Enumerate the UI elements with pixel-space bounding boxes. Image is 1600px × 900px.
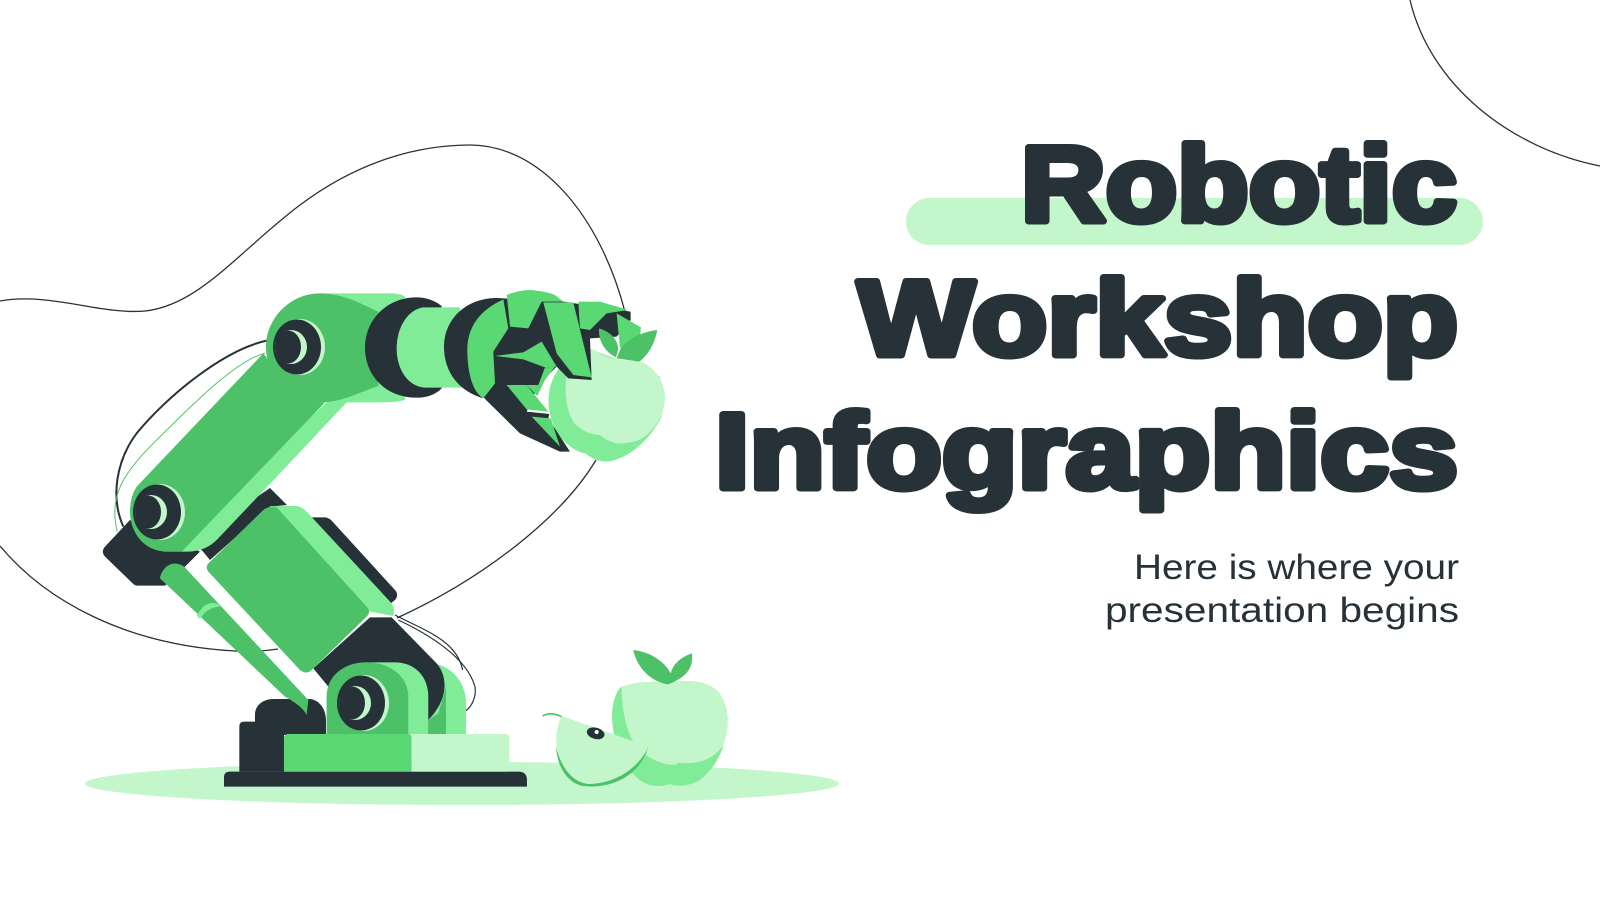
gripper holding apple	[365, 290, 665, 461]
front bracket	[327, 662, 428, 735]
stem	[543, 714, 562, 717]
apple face	[622, 681, 728, 765]
held apple	[548, 347, 662, 461]
long arm	[130, 353, 325, 552]
palm wedges	[495, 342, 557, 367]
dark back of housing	[310, 517, 397, 604]
apple leaves	[599, 328, 618, 357]
elbow shell	[266, 293, 378, 402]
second knuckle	[578, 302, 628, 330]
apple slice	[543, 714, 648, 787]
ground shadow	[85, 762, 839, 805]
apple leaves	[633, 650, 692, 684]
subtitle: Here is where your	[1134, 548, 1459, 587]
arm highlight	[163, 293, 405, 552]
upper arm	[130, 293, 405, 552]
slice face	[556, 716, 648, 784]
dark pedestal	[239, 699, 326, 772]
title: Robotic	[1021, 124, 1457, 244]
wrist joint	[133, 484, 185, 540]
palm	[444, 298, 503, 398]
title highlight bar	[906, 198, 1483, 245]
base joint	[337, 675, 389, 731]
base bar	[224, 772, 527, 787]
dark wrist plate	[103, 520, 200, 586]
subtitle: presentation begins	[1105, 591, 1459, 630]
apple shadow side	[612, 687, 723, 786]
base plate	[284, 734, 412, 772]
fingertip	[617, 313, 641, 348]
dark hand underlay	[460, 298, 631, 452]
collar	[365, 297, 442, 398]
main finger	[543, 302, 592, 377]
top knuckle	[507, 290, 563, 328]
rear bracket	[428, 663, 466, 735]
slice rind	[556, 747, 648, 787]
title: Workshop	[858, 258, 1458, 378]
cables at base	[395, 615, 475, 711]
piston	[160, 564, 308, 715]
cables at elbow	[115, 341, 267, 532]
forearm cylinder	[397, 307, 463, 388]
blob outline behind robot	[0, 145, 625, 651]
seed	[585, 726, 606, 741]
lower fingers	[507, 385, 548, 412]
title: Infographics	[715, 391, 1458, 511]
decorative corner arc	[1410, 0, 1600, 166]
motor housing	[270, 506, 394, 616]
apple on the ground	[612, 650, 728, 786]
title	[715, 124, 1458, 511]
lower body and base	[103, 488, 527, 787]
subtitle	[1105, 548, 1459, 630]
elbow joint	[273, 319, 325, 375]
dark shoulder	[313, 617, 445, 735]
robot arm	[103, 290, 665, 787]
